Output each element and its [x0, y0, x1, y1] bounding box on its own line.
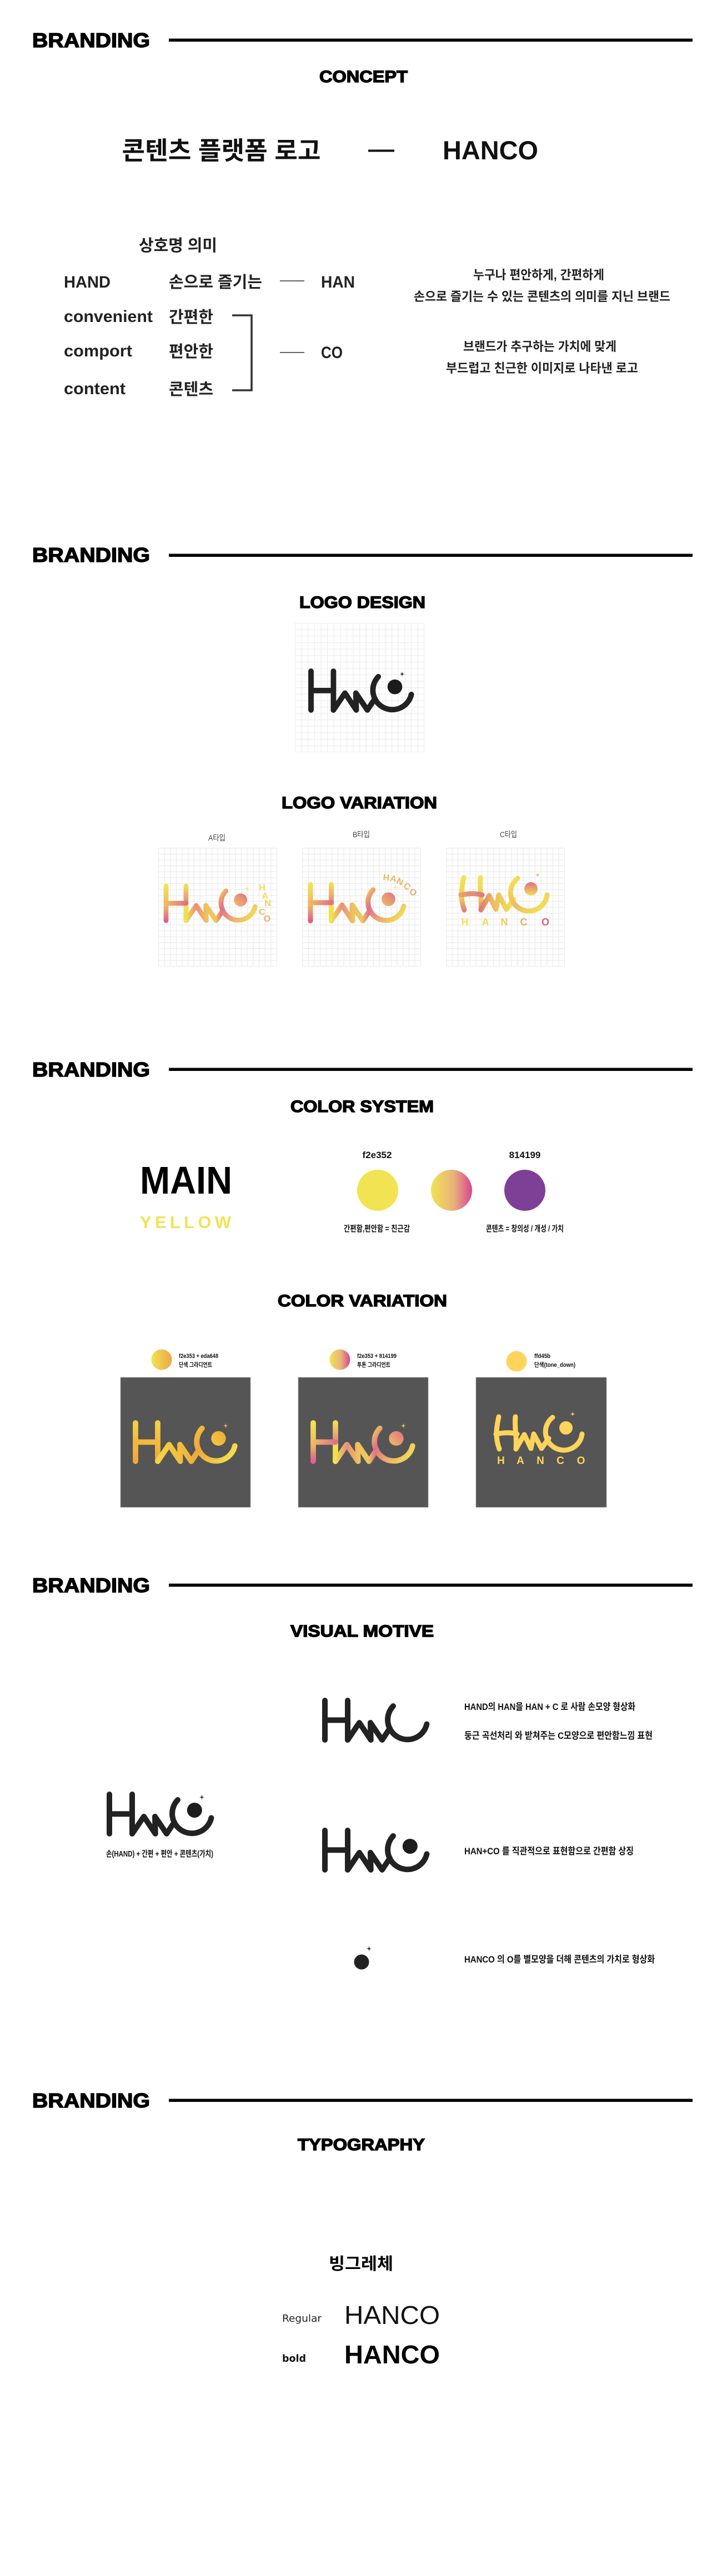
- colour variation 2: 투톤 그라디언트: [357, 1361, 390, 1368]
- main colour name: [140, 1159, 232, 1232]
- main colour name: MAIN: [140, 1159, 232, 1202]
- section header: branding: [32, 2089, 693, 2112]
- logo variation B: C: [402, 881, 413, 893]
- name breakdown table: HAND: [64, 273, 111, 291]
- dash between title and name: [368, 150, 394, 152]
- motive: han plus co: [325, 1830, 427, 1870]
- heading: visual motive: VISUAL MOTIVE: [290, 1622, 434, 1641]
- logo variation A: C: [259, 908, 265, 917]
- section header: branding: [32, 1058, 693, 1081]
- heading: color variation: COLOR VARIATION: [278, 1292, 447, 1310]
- name breakdown table: [64, 273, 355, 399]
- section header: branding: BRANDING: [32, 544, 150, 566]
- name breakdown table: 편안한: [169, 343, 213, 361]
- description: HAN: 손으로 즐기는 수 있는 콘텐츠의 의미를 지닌 브랜드: [414, 290, 670, 304]
- bold sample: bold: [282, 2353, 306, 2364]
- logo variation C: A: [482, 917, 489, 928]
- colour variation 3: C: [556, 1455, 564, 1467]
- section header: branding: [32, 1574, 693, 1597]
- main colour name: YELLOW: [140, 1212, 232, 1232]
- section header: branding: BRANDING: [32, 1058, 150, 1081]
- name breakdown table: 간편한: [169, 308, 213, 326]
- heading: logo design: LOGO DESIGN: [299, 593, 425, 612]
- colour variation 3: A: [517, 1455, 524, 1467]
- swatch caption: purple: 콘텐츠 = 창의성 / 개성 / 가치: [486, 1224, 564, 1234]
- panel: visual motive: [32, 1574, 693, 1970]
- motive text: hand shape: HAND의 HAN을 HAN + C 로 사람 손모양 형상화: [464, 1702, 635, 1712]
- section header: branding: [32, 29, 693, 52]
- motive text: dot and star: HANCO 의 O를 별모양을 더해 콘텐츠의 가치로 형상화: [464, 1954, 655, 1965]
- name breakdown table: comport: [64, 342, 132, 360]
- section header: branding: BRANDING: [32, 1574, 150, 1597]
- heading: concept: CONCEPT: [319, 68, 408, 86]
- panel: color system: [32, 1058, 693, 1507]
- heading: logo variation: LOGO VARIATION: [282, 794, 437, 812]
- logo variation B: B타입: [353, 830, 370, 839]
- motive text: hand shape: [464, 1702, 653, 1741]
- regular sample: [282, 2301, 440, 2330]
- colour variation 2: [298, 1349, 428, 1507]
- swatch: yellow: [357, 1150, 398, 1211]
- description: CO: 브랜드가 추구하는 가치에 맞게: [463, 340, 616, 354]
- colour variation 3: N: [537, 1455, 544, 1467]
- name breakdown table: convenient: [64, 308, 153, 326]
- bold sample: HANCO: [344, 2340, 440, 2369]
- logo variation C: C타입: [500, 830, 517, 839]
- logo variation B: A: [389, 874, 398, 884]
- logo variation A: A타입: [208, 833, 225, 842]
- heading: color system: COLOR SYSTEM: [290, 1098, 434, 1116]
- logo variation C: C: [520, 917, 528, 928]
- colour variation 1: 단색 그라디언트: [179, 1361, 212, 1368]
- motive text: han plus co: HAN+CO 를 직관적으로 표현함으로 간편함 상징: [464, 1846, 634, 1856]
- swatch: yellow: f2e352: [363, 1150, 392, 1160]
- regular sample: Regular: [282, 2313, 322, 2325]
- swatch caption: yellow: 간편함,편안함 = 친근감: [344, 1224, 410, 1234]
- logo variation B: H: [383, 873, 390, 883]
- colour variation 3: H: [497, 1455, 505, 1467]
- panel: logo design: [32, 544, 693, 967]
- logo variation A: O: [264, 914, 270, 924]
- logo variation C: N: [501, 917, 508, 928]
- name breakdown table: 콘텐츠: [169, 380, 213, 399]
- motive: hand shape: [325, 1700, 427, 1740]
- logo variation B: [302, 830, 421, 967]
- name breakdown table: 손으로 즐기는: [169, 273, 262, 291]
- section header: branding: BRANDING: [32, 2089, 150, 2112]
- colour variation 3: 단색(tone_down): [534, 1361, 575, 1368]
- logo variation C: H: [461, 917, 469, 928]
- swatch: purple: [504, 1150, 545, 1211]
- colour variation 1: f2e353 + eda648: [179, 1353, 218, 1360]
- name breakdown table: content: [64, 380, 126, 398]
- panel: typography: [32, 2089, 693, 2369]
- subheading: name meaning: 상호명 의미: [139, 237, 217, 255]
- regular sample: HANCO: [344, 2301, 440, 2330]
- heading: typography: TYPOGRAPHY: [298, 2136, 425, 2154]
- full logo with formula: 손(HAND) + 간편 + 편안 + 콘텐츠(가치): [106, 1849, 213, 1859]
- colour variation 3: [476, 1351, 606, 1507]
- logo variation A: H: [259, 883, 265, 893]
- logo variation A: A: [262, 892, 268, 901]
- motive: dot and star: [354, 1946, 372, 1970]
- colour variation 2: f2e353 + 814199: [357, 1353, 397, 1360]
- motive text: hand shape: 둥근 곡선처리 와 받쳐주는 C모양으로 편안함느낌 표현: [464, 1730, 653, 1741]
- full logo with formula: [106, 1794, 213, 1859]
- colour variation 3: O: [577, 1455, 585, 1467]
- logo variation B: N: [395, 877, 405, 888]
- logo on grid: [295, 623, 424, 752]
- bold sample: [282, 2340, 440, 2369]
- font name: 빙그레체: [329, 2255, 393, 2273]
- panel: concept: [32, 29, 693, 399]
- colour variation 3: ffd45b: [534, 1353, 550, 1360]
- description: CO: [446, 340, 638, 375]
- colour variation 1: [121, 1349, 250, 1507]
- description: HAN: 누구나 편안하게, 간편하게: [473, 268, 604, 282]
- name breakdown table: HAN: [321, 273, 355, 291]
- swatch: gradient: [431, 1170, 472, 1211]
- section header: branding: BRANDING: [32, 29, 150, 52]
- description: HAN: [414, 268, 670, 304]
- logo variation C: [446, 830, 565, 967]
- name breakdown table: CO: [321, 344, 343, 362]
- logo variation A: [158, 833, 277, 967]
- title: content platform logo: 콘텐츠 플랫폼 로고: [122, 137, 321, 165]
- description: CO: 부드럽고 친근한 이미지로 나타낸 로고: [446, 361, 638, 375]
- section header: branding: [32, 544, 693, 566]
- logo variation A: N: [264, 899, 271, 908]
- swatch: purple: 814199: [509, 1150, 540, 1160]
- logo variation C: O: [542, 917, 549, 928]
- title: HANCO: HANCO: [443, 135, 538, 165]
- logo variation B: O: [407, 887, 419, 898]
